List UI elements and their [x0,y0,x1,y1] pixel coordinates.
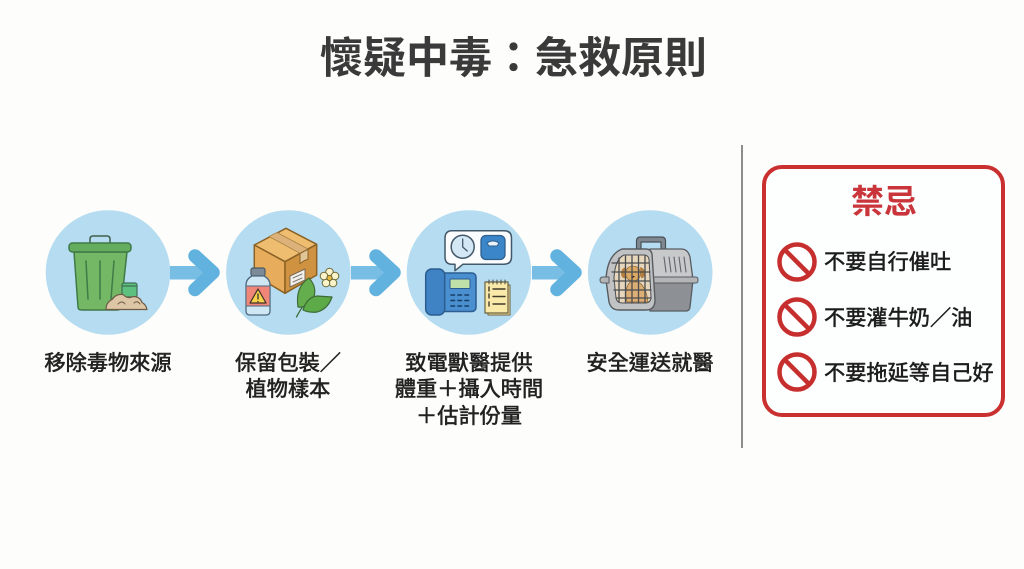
step 2 label: 保留包裝／ [235,352,341,375]
icon: phone, clock, scale and note in circle [407,210,531,335]
arrow 1 [170,256,213,290]
step 3 label: 體重＋攝入時間 [395,378,543,401]
rule 2: 不要灌牛奶／油 [824,307,972,330]
icon: prohibition 1 [777,242,817,282]
step 4 label: 安全運送就醫 [586,352,714,375]
icon: box, bottle and leaves in circle [226,210,351,335]
icon: trash can in circle [46,210,170,335]
step 3 label: 致電獸醫提供 [405,352,533,375]
rule 3: 不要拖延等自己好 [824,362,994,385]
step 2 label [235,352,341,401]
rule 1: 不要自行催吐 [824,251,951,274]
arrow 2 [351,256,394,290]
icon: pet carrier with dog in circle [588,210,712,335]
divider [741,145,743,448]
step 3 label: ＋估計份量 [416,405,522,428]
icon: prohibition 3 [777,352,817,392]
icon: prohibition 2 [777,297,817,337]
panel: contraindications [762,165,1005,417]
panel heading: 禁忌 [851,183,917,220]
step 2 label: 植物樣本 [246,378,330,401]
panel border [762,165,1005,417]
step 1 label: 移除毒物來源 [44,352,172,375]
title: 懷疑中毒：急救原則 [320,35,707,83]
step 3 label [395,352,543,428]
arrow 3 [532,256,575,290]
